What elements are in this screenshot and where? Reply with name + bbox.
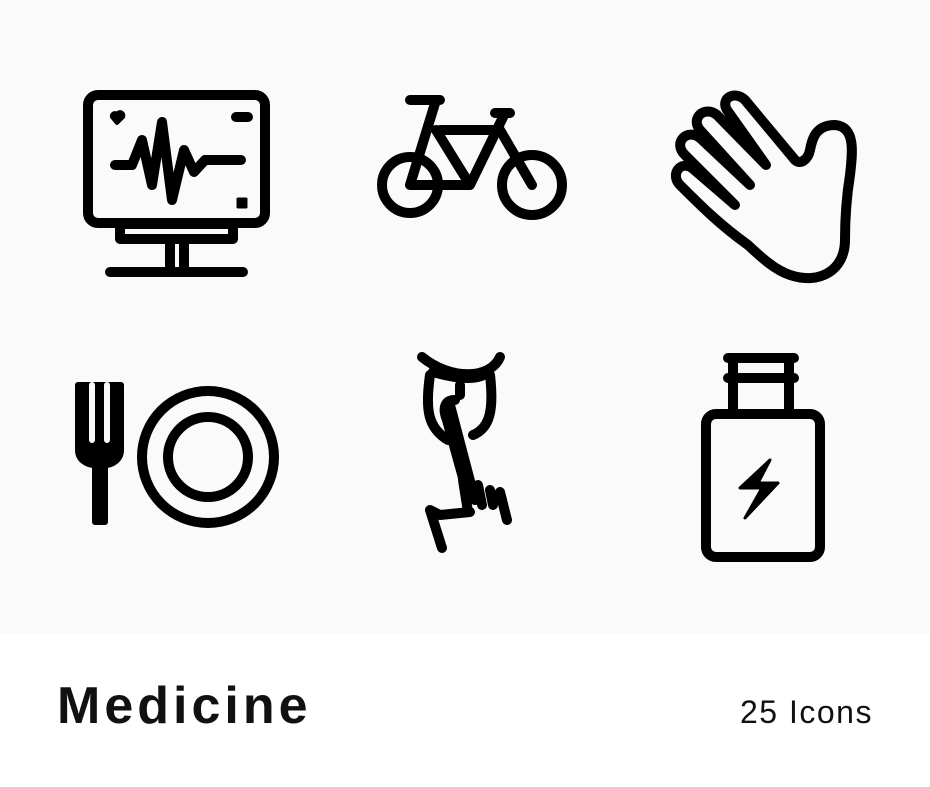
icon: battery bottle [706,358,820,557]
icon: heart monitor [88,95,265,272]
icon: waving hand [676,95,852,278]
title: Medicine [57,677,312,735]
icon: bicycle [382,100,562,215]
icon: tongue with finger [422,357,507,548]
icon count: 25 Icons [740,694,873,730]
icon: fork and plate [78,385,274,523]
